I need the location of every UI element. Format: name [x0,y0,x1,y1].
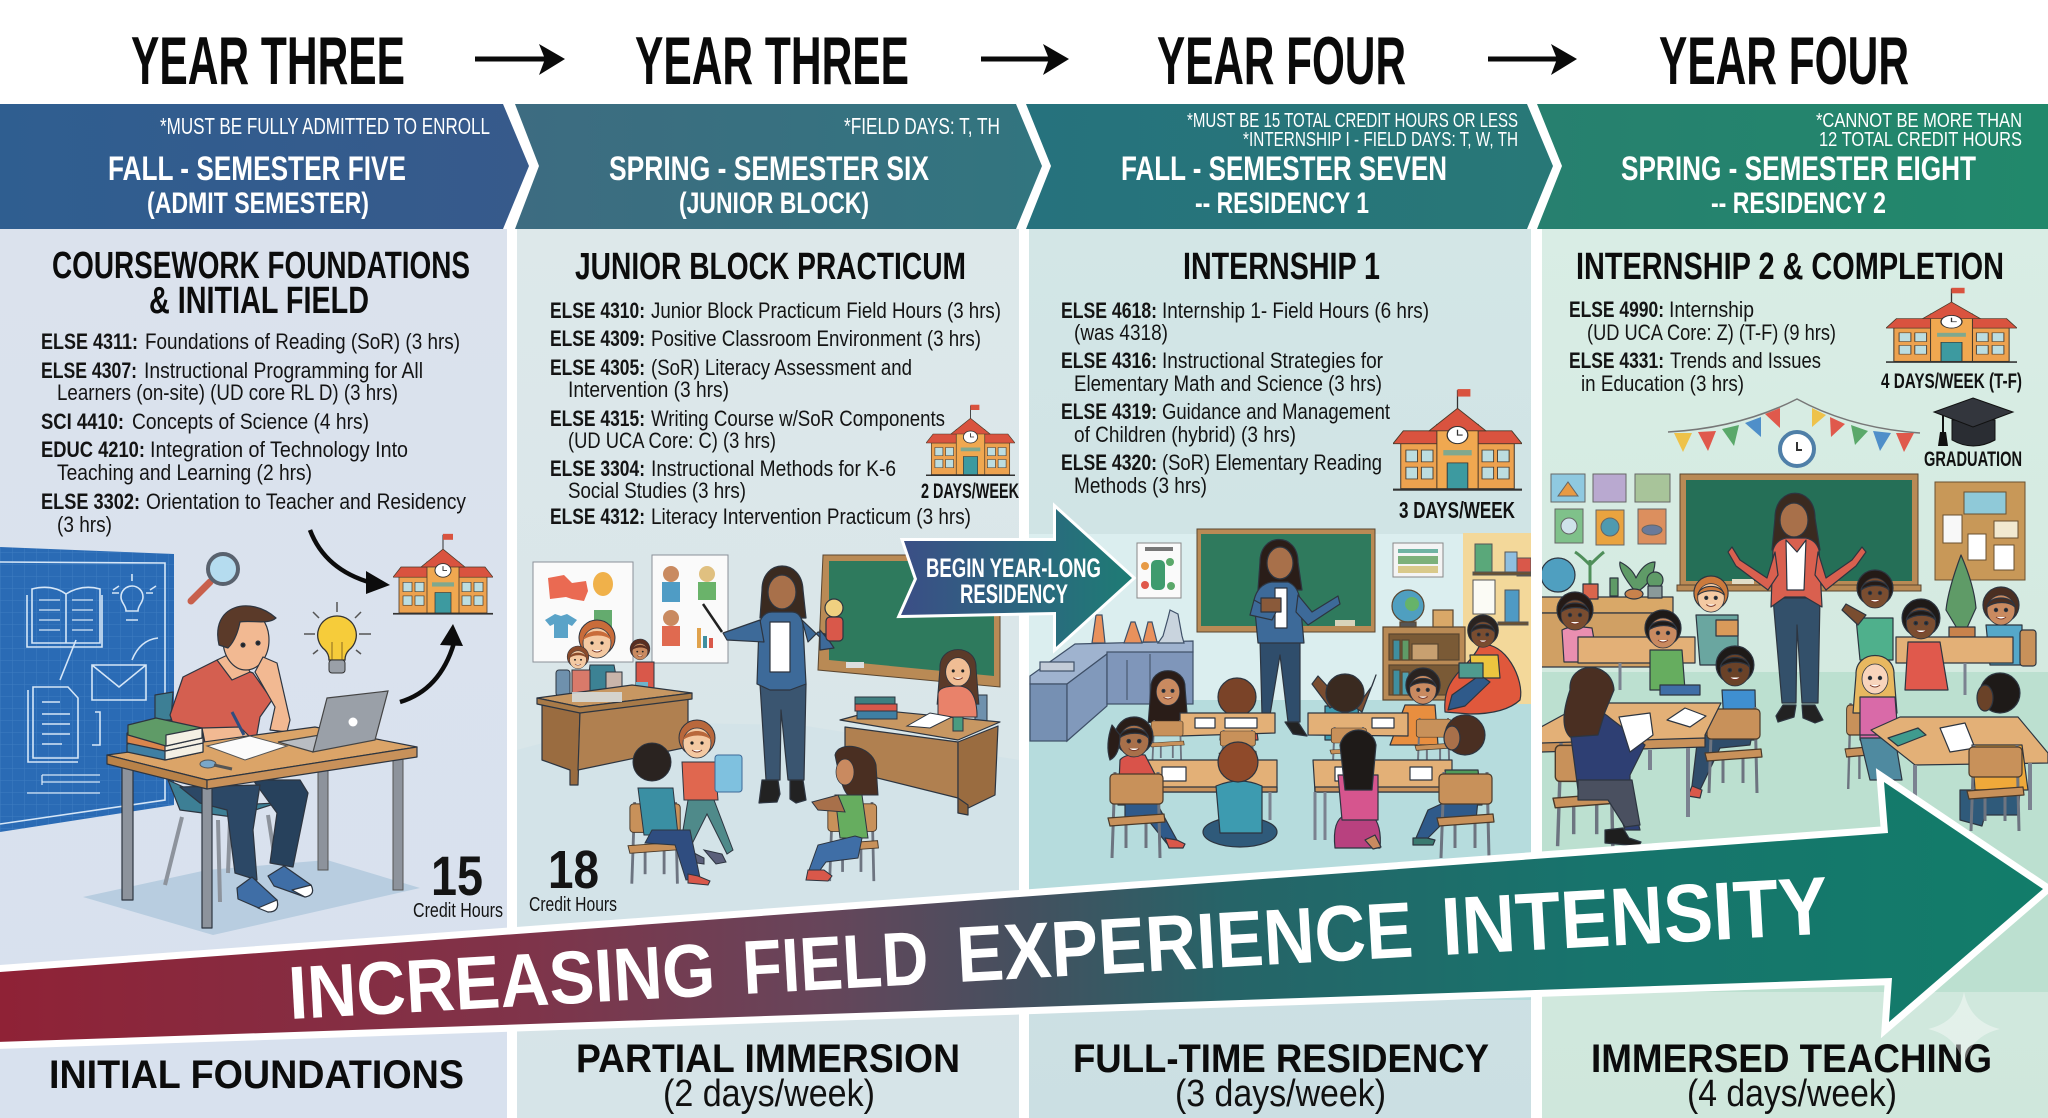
floor [1542,672,2048,992]
course list: ELSE 4990: [1569,297,1664,322]
desk [107,727,417,928]
course list: (UD UCA Core: C) (3 hrs) [568,428,776,453]
course list: Literacy Intervention Practicum (3 hrs) [651,504,971,529]
course list: Trends and Issues [1670,348,1821,373]
callout arrow: begin year-long residency: BEGIN YEAR-LONG [926,553,1101,583]
panel: semester eight [1537,104,2048,1118]
label: full-time residency: (3 days/week) [1175,1073,1386,1115]
course list: ELSE 4315: [550,406,645,431]
illustration: junior block classroom [532,554,1001,886]
course list: ELSE 4305: [550,355,645,380]
blueprint [0,547,174,832]
label: initial foundations: INITIAL FOUNDATIONS [49,1053,464,1097]
header chevron: spring semester six: SPRING - SEMESTER SIX [609,150,929,188]
chair [155,692,277,902]
course list: (SoR) Literacy Assessment and [651,355,912,380]
course list: Elementary Math and Science (3 hrs) [1074,371,1382,396]
header chevron: spring semester eight: -- RESIDENCY 2 [1711,187,1886,220]
course list: ELSE 4312: [550,504,645,529]
icon: school, 2 days per week: 2 DAYS/WEEK [921,480,1019,503]
header chevron: spring semester six: *FIELD DAYS: T, TH [844,113,1000,139]
laptop [278,691,388,752]
chalkboard [818,555,1000,687]
header chevron: fall semester five [0,104,529,229]
course list: Methods (3 hrs) [1074,473,1207,498]
arrow: to fall year four [981,44,1069,75]
icon: graduation cap [1934,398,2013,446]
callout arrow: begin year-long residency: RESIDENCY [960,579,1068,609]
icon: school [393,534,493,615]
callout arrow: begin year-long residency [901,509,1132,647]
beanbag reading child [1445,615,1521,714]
icon: magnifier [191,554,238,601]
banner arrow: increasing field experience intensity: EXPERIENCE [954,885,1415,999]
course list: ELSE 4310: [550,298,645,323]
panel title: JUNIOR BLOCK PRACTICUM [575,246,966,288]
header chevron: fall semester seven: FALL - SEMESTER SEVEN [1121,150,1447,188]
header chevron: fall semester five: FALL - SEMESTER FIVE [108,150,406,188]
teacher [1728,493,1866,723]
course list: ELSE 4331: [1569,348,1664,373]
header chevron: fall semester seven [1026,104,1553,229]
back desks and students [1557,570,2036,695]
credit hours: 18: Credit Hours [529,894,617,916]
bunting [1668,399,1920,452]
front right group: students and desk [1845,656,2048,835]
heading: year three spring: YEAR THREE [635,23,909,99]
panel: semester five [0,104,529,1118]
label: partial immersion: (2 days/week) [663,1073,875,1115]
heading: year four spring: YEAR FOUR [1659,23,1909,99]
watermark sparkle [1928,992,2000,1066]
course list: Teaching and Learning (2 hrs) [57,460,312,485]
children with teacher: boy, girl, seated child [628,720,878,885]
course list: (was 4318) [1074,320,1168,345]
open notebook and magnifier [200,712,287,769]
label: full-time residency [1073,1037,1489,1115]
course list: Internship [1669,297,1754,322]
lab counter and flasks [1030,610,1193,741]
icon: lightbulb [304,602,371,673]
label: immersed teaching: IMMERSED TEACHING [1591,1037,1992,1081]
course list: ELSE 4311: [41,329,138,354]
course list: Guidance and Management [1162,399,1390,424]
heading: year four fall: YEAR FOUR [1157,23,1406,99]
students: front rows and desks [1108,715,1494,858]
course list: Integration of Technology Into [150,437,408,462]
posters [533,555,728,663]
course list: Orientation to Teacher and Residency [146,489,466,514]
course list: Instructional Strategies for [1162,348,1383,373]
credit hours: 15: 15 [431,844,483,907]
label: partial immersion [576,1037,960,1115]
course list: Social Studies (3 hrs) [568,478,746,503]
front left group: observer and desk [1541,646,1762,846]
illustration: residency classroom [1029,529,1531,1000]
illustration: immersed teaching classroom [1541,474,2048,992]
icon: school, 2 days per week [921,405,1019,503]
credit hours: 18: 18 [548,840,599,900]
wall clock [1780,432,1814,466]
course list: (SoR) Elementary Reading [1162,450,1382,475]
desk back legs [318,755,403,890]
course list: Learners (on-site) (UD core RL D) (3 hrs) [57,380,398,405]
course list [1569,297,1836,396]
course list: (3 hrs) [57,512,112,537]
course list: EDUC 4210: [41,437,145,462]
panel title [52,245,470,322]
header chevron: fall semester seven: *INTERNSHIP I - FIELD DAYS: T, W, TH [1243,129,1518,151]
course list: Positive Classroom Environment (3 hrs) [651,326,981,351]
arrow: to spring year three [475,44,565,75]
label: immersed teaching: (4 days/week) [1687,1073,1897,1115]
banner arrow: increasing field experience intensity: FIELD [740,916,931,1011]
wall pictures [1551,474,1670,545]
course list: ELSE 4307: [41,358,137,383]
course list: Instructional Programming for All [144,358,423,383]
course list: (UD UCA Core: Z) (T-F) (9 hrs) [1587,320,1836,345]
course list: of Children (hybrid) (3 hrs) [1074,422,1296,447]
course list: SCI 4410: [41,409,124,434]
course list: ELSE 4618: [1061,298,1157,323]
header chevron: spring semester eight [1537,104,2048,229]
course list: Junior Block Practicum Field Hours (3 hrs) [651,298,1001,323]
course list: in Education (3 hrs) [1581,371,1744,396]
header chevron: spring semester six: (JUNIOR BLOCK) [679,187,869,220]
books [127,718,203,760]
bookshelf and globe [1383,590,1465,700]
course list: ELSE 4309: [550,326,645,351]
left desk with puppets [537,620,692,785]
label: partial immersion: PARTIAL IMMERSION [576,1037,960,1081]
panel title: COURSEWORK FOUNDATIONS [52,245,470,287]
course list [550,298,1001,529]
course list: Foundations of Reading (SoR) (3 hrs) [145,329,460,354]
illustration: student studying at desk [0,530,493,935]
teacher [1250,540,1340,736]
panel title: & INITIAL FIELD [149,280,369,322]
course list: Intervention (3 hrs) [568,377,729,402]
banner arrow: increasing field experience intensity: INTENSITY [1439,861,1830,973]
icon: school, 4 days per week [1881,288,2022,393]
panel: semester seven [1026,104,1553,1118]
header chevron: fall semester five: (ADMIT SEMESTER) [147,187,369,220]
course list: ELSE 4319: [1061,399,1157,424]
floor shadow [83,860,420,935]
panel title: INTERNSHIP 1 [1183,246,1380,288]
credit hours: 15: Credit Hours [413,900,503,922]
chalkboard [1197,529,1375,632]
course list: Internship 1- Field Hours (6 hrs) [1162,298,1429,323]
arrow: to spring year four [1488,44,1577,75]
bulletin board [1935,482,2025,580]
floor shading [517,722,1019,990]
yellow wall shelves [1473,544,1531,625]
course list: ELSE 4320: [1061,450,1157,475]
plant right [1946,555,1976,637]
heading: year three fall: YEAR THREE [131,23,405,99]
course list: Instructional Methods for K-6 [651,456,896,481]
header chevron: fall semester seven: *MUST BE 15 TOTAL CREDIT HOURS OR LESS [1187,110,1518,132]
heading row: year labels [131,23,1909,99]
icon: school, 3 days per week: 3 DAYS/WEEK [1399,497,1515,523]
poster: right [1393,543,1443,577]
arrows to school [310,530,463,702]
course list: Concepts of Science (4 hrs) [132,409,369,434]
chalkboard [1677,474,1921,591]
banner arrow: increasing field experience intensity [0,782,2043,1043]
course list [41,329,466,537]
credit hours: 18 [529,840,617,916]
poster: left [1137,543,1181,598]
panel: semester six [515,104,1042,1118]
header chevron: spring semester six [515,104,1042,229]
label: immersed teaching [1591,1037,1992,1115]
course list: ELSE 3302: [41,489,140,514]
course list: Writing Course w/SoR Components [651,406,945,431]
icon: school, 3 days per week [1393,389,1522,523]
student [170,606,313,912]
course list [1061,298,1429,498]
teacher [703,566,843,803]
course list: ELSE 4316: [1061,348,1157,373]
students: back rows and desks [1148,667,1451,760]
shelf, plants and globe [1541,552,1673,667]
credit hours: 15 [413,844,503,922]
right desk with child [840,650,1000,815]
banner arrow: increasing field experience intensity: INCREASING [286,927,717,1035]
wall and floor [1029,533,1531,1000]
header chevron: fall semester seven: -- RESIDENCY 1 [1195,187,1369,220]
label: full-time residency: FULL-TIME RESIDENCY [1073,1037,1489,1081]
course list: ELSE 3304: [550,456,645,481]
header chevron: fall semester five: *MUST BE FULLY ADMITTED TO ENROLL [160,113,490,139]
